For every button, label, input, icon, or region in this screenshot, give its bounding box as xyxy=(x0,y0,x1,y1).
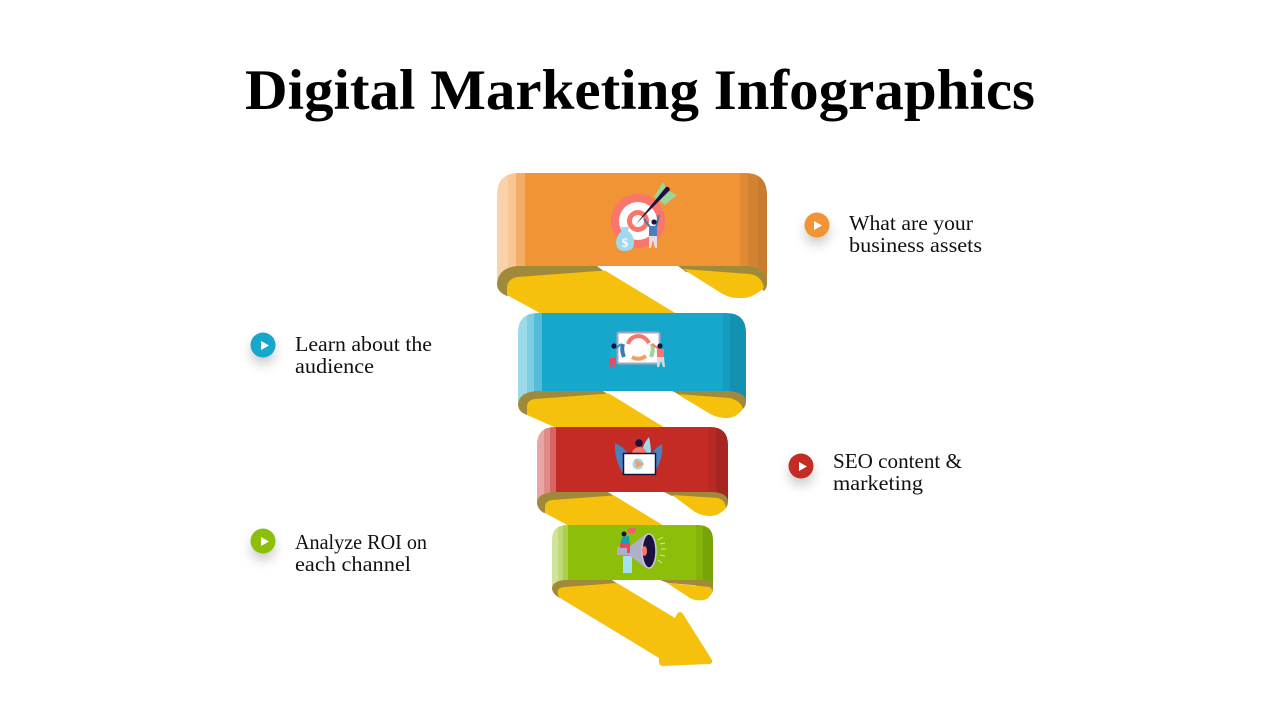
band 3: red xyxy=(537,427,728,532)
icon: target with arrow xyxy=(611,182,677,251)
title: Digital Marketing Infographics xyxy=(245,59,1035,122)
callout: SEO content and marketing: marketing xyxy=(833,471,923,495)
icon: video tablet with person xyxy=(615,437,662,474)
band 4: green xyxy=(552,525,713,666)
icon: megaphone with person xyxy=(617,528,666,573)
callout: learn about the audience xyxy=(250,332,432,378)
callout: learn about the audience: audience xyxy=(295,354,374,378)
callout: what are your business assets: business assets xyxy=(849,233,982,257)
callout: SEO content and marketing: SEO content & xyxy=(833,449,962,473)
arrow: yellow ribbon end xyxy=(558,583,712,666)
callout: what are your business assets xyxy=(804,211,982,257)
callout: what are your business assets: What are your xyxy=(849,211,973,235)
callout: learn about the audience: Learn about the xyxy=(295,332,432,356)
callout: analyze ROI on each channel: each channel xyxy=(295,552,411,576)
band 1: orange xyxy=(497,173,767,322)
band 2: blue xyxy=(518,313,746,434)
icon: cycle board with people xyxy=(609,332,665,367)
icon: target with arrow: $ xyxy=(622,235,629,250)
callout: SEO content and marketing xyxy=(788,449,962,495)
callout: analyze ROI on each channel: Analyze ROI on xyxy=(295,530,427,554)
callout: analyze ROI on each channel xyxy=(250,528,427,576)
